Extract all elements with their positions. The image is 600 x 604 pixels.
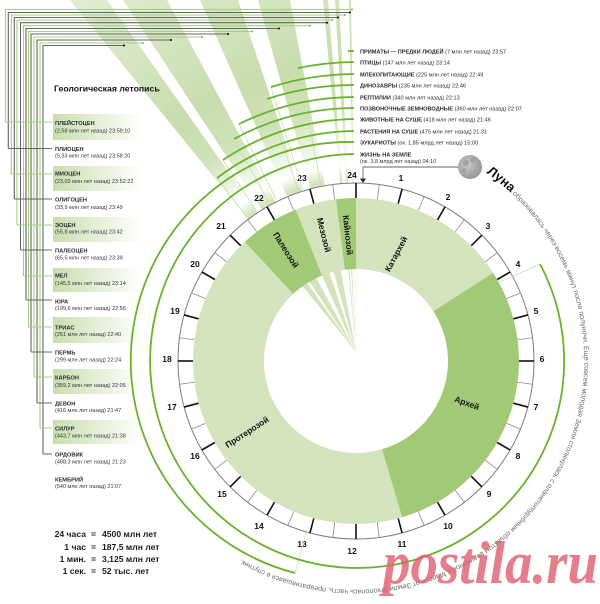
geological periods list: ОРДОВИК <box>55 452 84 458</box>
hour numbers: 2 <box>446 192 451 202</box>
geological periods list: (540 млн лет назад) 21:07 <box>55 484 121 490</box>
evolution events list: ЭУКАРИОТЫ (ок. 1,85 млрд лет назад) 15:00 <box>360 140 478 146</box>
geological periods list: ПАЛЕОЦЕН <box>55 248 88 254</box>
hour numbers: 9 <box>487 489 492 499</box>
evolution events list: МЛЕКОПИТАЮЩИЕ (225 млн лет назад) 22:49 <box>360 72 483 78</box>
moon with pointer to midnight <box>360 155 482 183</box>
eon and era labels: Протерозой <box>223 414 271 450</box>
hour numbers: 1 <box>399 173 404 183</box>
geological periods list: (23,03 млн лет назад) 23:52:22 <box>55 179 133 185</box>
hour numbers: 15 <box>217 489 227 499</box>
green event arcs <box>131 51 564 573</box>
hour numbers: 22 <box>254 193 264 203</box>
time scale table: 3,125 млн лет <box>102 554 160 564</box>
hour numbers: 8 <box>516 451 521 461</box>
era sector: Paleozoic <box>269 243 309 268</box>
hour numbers: 4 <box>516 259 521 269</box>
geological periods list: (443,7 млн лет назад) 21:38 <box>55 434 126 440</box>
evolution events list: РЕПТИЛИИ (340 млн лет назад) 22:13 <box>360 95 460 101</box>
hour numbers: 11 <box>398 539 407 549</box>
donut of geological eons <box>228 234 484 488</box>
evolution events list: ЖИЗНЬ НА ЗЕМЛЕ <box>359 152 412 158</box>
geological periods list: МИОЦЕН <box>55 172 80 178</box>
eon ring: Hadean and Proterozoic base <box>228 234 484 488</box>
evolution events list: ПРИМАТЫ — ПРЕДКИ ЛЮДЕЙ (7 млн лет назад) 23:57 <box>360 47 506 55</box>
geological periods list: (33,9 млн лет назад) 23:49 <box>55 205 123 211</box>
hour numbers: 23 <box>297 173 307 183</box>
time scale table: = <box>91 554 96 564</box>
geological periods list: ТРИАС <box>55 326 74 332</box>
evolution events list: ДИНОЗАВРЫ (235 млн лет назад) 22:46 <box>360 83 466 89</box>
hour numbers: 20 <box>190 259 200 269</box>
time scale table: 187,5 млн лет <box>102 542 160 552</box>
time scale table: 1 сек. <box>63 566 86 576</box>
eon and era labels <box>223 215 481 450</box>
time scale table: = <box>91 566 96 576</box>
geological periods list: ПЕРМЬ <box>55 350 75 356</box>
time scale table: 52 тыс. лет <box>102 566 149 576</box>
geological periods list: (199,6 млн лет назад) 22:56 <box>55 306 126 312</box>
eon and era labels: Мезозой <box>315 217 333 253</box>
geological periods list: МЕЛ <box>55 274 68 280</box>
hour numbers: 12 <box>347 546 357 556</box>
time scale table: = <box>91 529 96 539</box>
geological periods list: (359,2 млн лет назад) 22:05 <box>55 383 126 389</box>
radial leaders from event arcs to the clock <box>217 68 540 573</box>
geological periods list: ОЛИГОЦЕН <box>55 198 87 204</box>
geological periods list: (2,58 млн лет назад) 23:59:10 <box>55 128 130 134</box>
hour numbers: 3 <box>486 221 491 231</box>
evolution events list: ПОЗВОНОЧНЫЕ ЗЕМНОВОДНЫЕ (360 млн лет назад) 22:07 <box>360 106 522 112</box>
eon and era labels: Палеозой <box>271 230 301 270</box>
eon and era labels: Кайнозой <box>341 215 355 255</box>
geological periods list: (488,3 млн лет назад) 21:23 <box>55 460 126 466</box>
curved moon caption: Луна образовалась через восемь минут после полуночи. Еще совсем молодая Земля столкнулась с планетоподобным объектом величиной с Марс, и от Земли откололась часть, превратившаяся в спутник. <box>241 166 589 594</box>
hour numbers: 19 <box>170 306 180 316</box>
time scale table: 4500 млн лет <box>102 529 157 539</box>
geological periods list: КЕМБРИЙ <box>55 476 83 484</box>
time scale table <box>55 529 160 576</box>
period highlight bands <box>53 114 141 444</box>
evolution events list <box>359 47 522 165</box>
eon sector: Archean <box>392 292 484 483</box>
hour numbers: 16 <box>190 451 200 461</box>
geological periods list: (145,5 млн лет назад) 23:14 <box>55 281 126 287</box>
eon and era labels: Катархей <box>383 235 409 273</box>
geological periods list: (251 млн лет назад) 22:40 <box>55 332 121 338</box>
evolution events list: (ок. 3,8 млрд лет назад) 04:10 <box>360 159 436 165</box>
period beams radiating from the clock centre <box>70 0 356 352</box>
time scale table: = <box>91 542 96 552</box>
geological periods list: ЮРА <box>55 300 68 306</box>
24-hour clock ring <box>178 183 534 539</box>
time scale table: 24 часа <box>55 529 86 539</box>
eon and era labels: Архей <box>453 394 481 412</box>
hour numbers: 10 <box>443 521 453 531</box>
geological periods list: СИЛУР <box>55 426 75 432</box>
timeline connectors from periods to beams <box>6 8 353 454</box>
time scale table: 1 мин. <box>60 554 86 564</box>
hour numbers: 14 <box>254 521 264 531</box>
hour numbers: 6 <box>540 354 545 364</box>
geological periods list: ПЛЕЙСТОЦЕН <box>55 119 95 127</box>
evolution events list: ПТИЦЫ (147 млн лет назад) 23:14 <box>360 60 450 66</box>
geological periods list <box>55 119 133 490</box>
geological periods list: (5,33 млн лет назад) 23:58:20 <box>55 154 130 160</box>
hour numbers: 7 <box>534 402 539 412</box>
geological periods list: (65,5 млн лет назад) 23:39 <box>55 256 123 262</box>
geological periods list: (299 млн лет назад) 22:24 <box>55 358 121 364</box>
time scale table: 1 час <box>64 542 86 552</box>
hour numbers: 24 <box>347 170 357 180</box>
title: Геологическая летопись <box>54 84 160 94</box>
hour numbers: 21 <box>216 221 226 231</box>
hour numbers: 5 <box>534 306 539 316</box>
geological periods list: КАРБОН <box>55 376 79 382</box>
geological periods list: ПЛИОЦЕН <box>55 147 84 153</box>
evolution events list: ЖИВОТНЫЕ НА СУШЕ (418 млн лет назад) 21:46 <box>359 117 491 123</box>
era sector: Cenozoic <box>340 234 356 235</box>
hour numbers: 18 <box>162 354 172 364</box>
hour numbers: 13 <box>297 539 307 549</box>
geological periods list: ЭОЦЕН <box>55 223 76 229</box>
evolution events list: РАСТЕНИЯ НА СУШЕ (475 млн лет назад) 21:31 <box>360 129 487 135</box>
hour numbers: 17 <box>167 402 177 412</box>
hour numbers <box>162 170 545 556</box>
geological periods list: ДЕВОН <box>55 402 75 408</box>
geological periods list: (416 млн лет назад) 21:47 <box>55 408 121 414</box>
geological periods list: (55,8 млн лет назад) 23:42 <box>55 230 123 236</box>
